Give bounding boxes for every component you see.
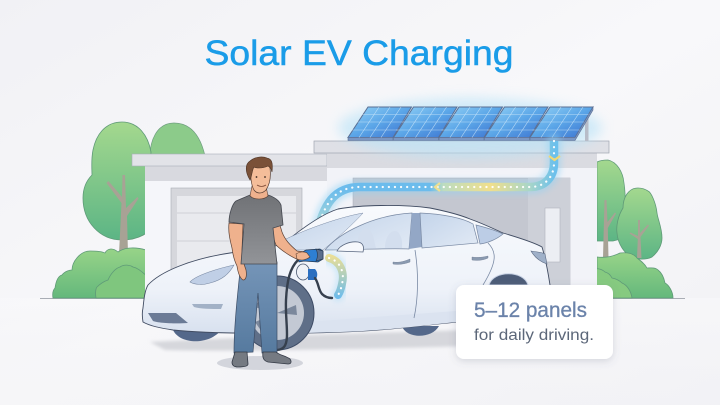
arrowhead: at charger [309,238,321,244]
charge port and energy into car [296,258,343,295]
car [142,205,550,350]
legs [234,262,277,353]
panel 1 [348,107,412,140]
car body [142,205,550,333]
headlight [190,265,234,284]
main tree [83,122,151,254]
door handles [393,256,488,264]
callout [456,285,613,359]
charge port [296,264,310,280]
shoes [232,352,291,367]
door seams [414,243,494,318]
shirt [229,195,283,264]
bushes [53,248,146,298]
right wing [314,141,609,298]
garage door left [171,188,302,298]
tail light [531,251,547,264]
rear right tree [597,160,625,241]
charging connector in hand [296,249,323,262]
neck [250,186,268,199]
front seats [358,229,402,248]
windshield [284,213,363,250]
left wing [132,154,327,298]
front side window [325,213,412,250]
mirror [337,242,363,252]
solar panels [338,98,602,158]
charging cable [275,260,332,350]
car shadow [150,330,470,351]
callout body: for daily driving. [474,327,594,344]
house [132,141,609,298]
back tree [150,123,205,156]
arrowhead: roof drop [549,156,560,160]
far side wheels [173,326,439,341]
garage opening right [353,178,570,298]
left trees and bushes [53,122,205,298]
hair [246,157,272,180]
side sill [306,311,456,333]
rear side window [420,213,478,248]
title: Solar EV Charging [204,34,514,73]
panel 3 [439,107,502,140]
pillar [409,213,422,249]
front grille [148,313,188,323]
fog vent [192,304,223,309]
right trees and bushes [574,160,673,298]
energy flow: roof to charger [309,141,560,244]
callout headline: 5–12 panels [474,299,587,322]
back arm [229,223,246,280]
panel 5 [530,107,593,140]
ground shadow [217,356,303,370]
front right tree [617,188,662,259]
front arm [271,212,311,261]
rear wheel [489,274,528,285]
panel 4 [484,107,548,140]
rear quarter window [476,225,503,244]
arrowhead: mid run [435,183,440,191]
front wheel [240,276,314,350]
face [251,164,270,193]
person [217,157,311,370]
panel 2 [394,107,457,140]
right bushes [597,253,673,298]
